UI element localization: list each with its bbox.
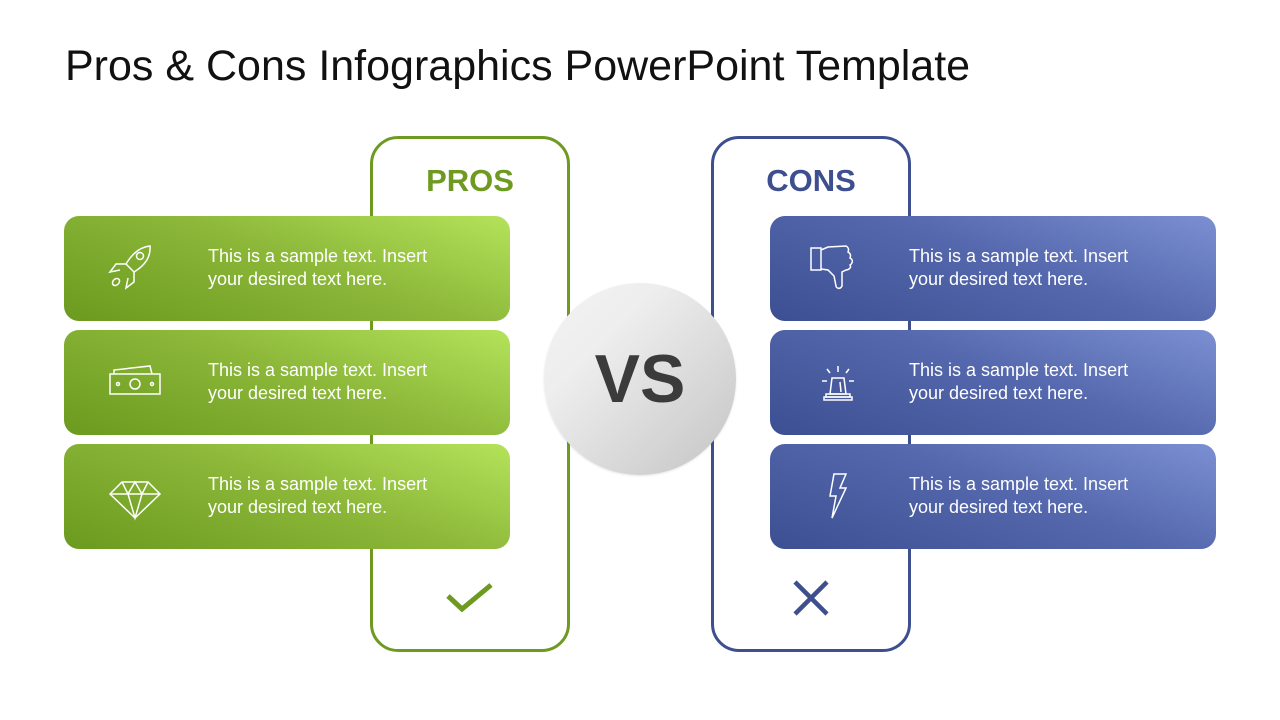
vs circle: [544, 283, 736, 475]
panel: cons frame: [711, 136, 911, 652]
con item 1: your desired text here.: [909, 269, 1088, 289]
heading: cons: CONS: [766, 163, 856, 198]
title: Pros & Cons Infographics PowerPoint Template: [65, 42, 970, 90]
panel: pros frame: [370, 136, 570, 652]
con item 3: your desired text here.: [909, 497, 1088, 517]
pro item 2: your desired text here.: [208, 383, 387, 403]
con item 1: This is a sample text. Insert: [909, 246, 1128, 266]
con item 3: This is a sample text. Insert: [909, 474, 1128, 494]
con item 2: your desired text here.: [909, 383, 1088, 403]
heading: pros: PROS: [426, 163, 514, 198]
pro item 3: your desired text here.: [208, 497, 387, 517]
vs circle: VS: [595, 341, 685, 417]
pro item 2: This is a sample text. Insert: [208, 360, 427, 380]
icon: money: [109, 365, 161, 395]
icon: rocket: [108, 245, 151, 290]
pro item 2: [64, 330, 510, 435]
pro item 3: [64, 444, 510, 549]
icon: cross: [794, 580, 828, 616]
pro item 3: This is a sample text. Insert: [208, 474, 427, 494]
con item 3: [770, 444, 1216, 549]
icon: lightning: [829, 473, 848, 518]
icon: alarm siren: [822, 366, 854, 401]
con item 1: [770, 216, 1216, 321]
icon: diamond: [109, 480, 161, 520]
con item 2: This is a sample text. Insert: [909, 360, 1128, 380]
pro item 1: [64, 216, 510, 321]
pro item 1: your desired text here.: [208, 269, 387, 289]
icon: check mark: [446, 583, 492, 612]
icon: thumbs down: [810, 245, 854, 290]
pro item 1: This is a sample text. Insert: [208, 246, 427, 266]
con item 2: [770, 330, 1216, 435]
